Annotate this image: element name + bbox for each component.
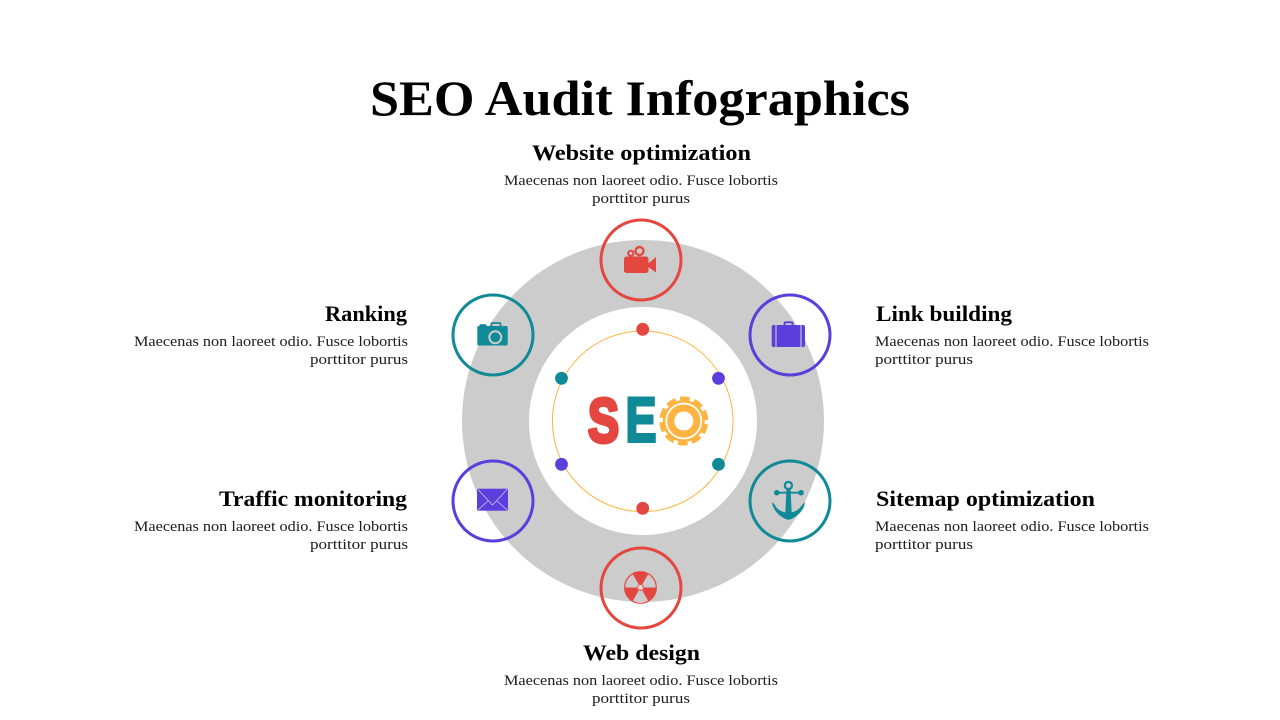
node: radiation xyxy=(601,548,681,628)
center orbit with dots xyxy=(552,323,733,515)
node: camera xyxy=(453,295,533,375)
text block: web design: porttitor purus xyxy=(592,691,690,707)
node: envelope xyxy=(453,461,533,541)
icon: briefcase xyxy=(772,322,805,347)
icon: envelope xyxy=(477,489,508,511)
text block: ranking: Ranking xyxy=(325,301,408,326)
text block: link building: Maecenas non laoreet odio. Fusce lobortis xyxy=(875,334,1149,350)
text block: sitemap optimization: Maecenas non laoreet odio. Fusce lobortis xyxy=(875,519,1149,535)
text block: web design: Maecenas non laoreet odio. Fusce lobortis xyxy=(504,673,778,689)
text block: ranking: porttitor purus xyxy=(310,352,408,368)
icon: gear xyxy=(660,397,708,445)
icon: radiation xyxy=(625,572,656,603)
icon: anchor xyxy=(772,482,805,520)
grey ring xyxy=(496,274,790,568)
text block: web design xyxy=(504,640,778,707)
text block: sitemap optimization: Sitemap optimization xyxy=(876,486,1096,511)
SEO logo xyxy=(588,386,708,456)
text block: sitemap optimization: porttitor purus xyxy=(875,537,973,553)
text block: sitemap optimization xyxy=(875,486,1149,553)
text block: traffic monitoring: Traffic monitoring xyxy=(219,486,408,511)
text block: traffic monitoring: Maecenas non laoreet odio. Fusce lobortis xyxy=(134,519,408,535)
text block: traffic monitoring: porttitor purus xyxy=(310,537,408,553)
text block: ranking xyxy=(134,301,408,368)
text block: traffic monitoring xyxy=(134,486,408,553)
node: anchor xyxy=(750,461,830,541)
text block: web design: Web design xyxy=(583,640,701,665)
text block: website optimization xyxy=(504,140,778,207)
SEO logo: E xyxy=(626,386,656,456)
text block: website optimization: porttitor purus xyxy=(592,191,690,207)
text block: link building: porttitor purus xyxy=(875,352,973,368)
icon: video camera xyxy=(624,247,656,273)
title: SEO Audit Infographics xyxy=(370,70,910,126)
icon: camera xyxy=(477,323,508,346)
node: video camera xyxy=(601,220,681,300)
node: briefcase xyxy=(750,295,830,375)
text block: website optimization: Website optimization xyxy=(532,140,752,165)
text block: link building xyxy=(875,301,1149,368)
SEO logo: S xyxy=(588,387,619,456)
text block: website optimization: Maecenas non laoreet odio. Fusce lobortis xyxy=(504,173,778,189)
text block: link building: Link building xyxy=(876,301,1013,326)
text block: ranking: Maecenas non laoreet odio. Fusce lobortis xyxy=(134,334,408,350)
